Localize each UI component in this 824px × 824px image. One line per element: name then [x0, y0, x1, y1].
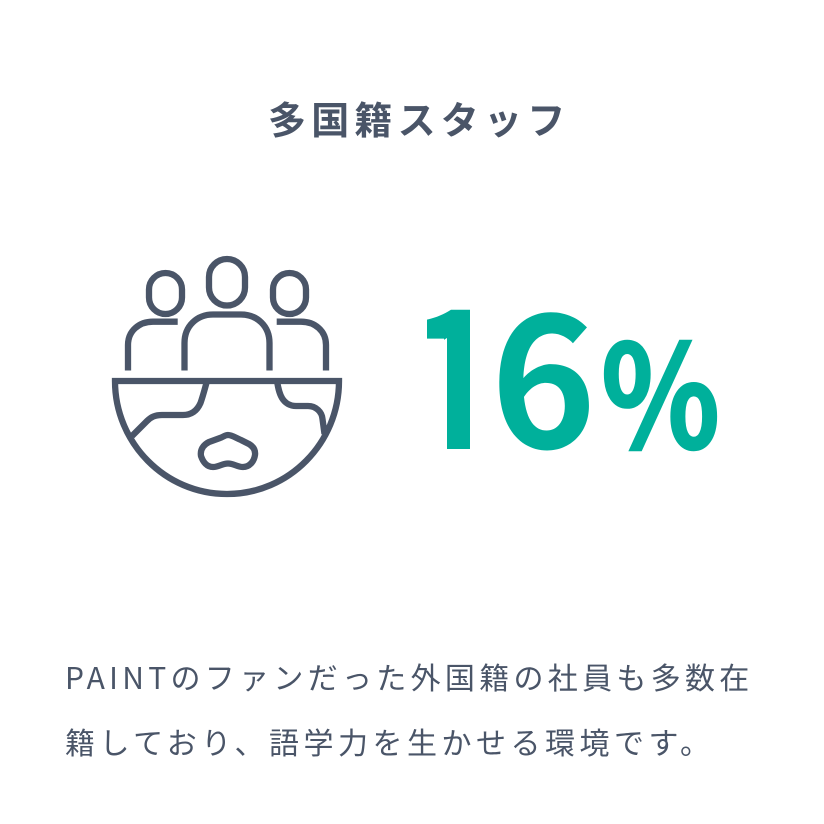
description text: PAINTのファンだった外国籍の社員も多数在: [65, 654, 754, 698]
statistic: 16%: 1: [398, 232, 509, 504]
statistic: 16%: 6: [490, 239, 597, 500]
statistic: 16%: [427, 310, 718, 452]
description text: [65, 654, 754, 763]
title: 多国籍スタッフ: [268, 90, 570, 145]
description text: 籍しており、語学力を生かせる環境です。: [65, 719, 714, 763]
statistic: 16%: %: [601, 283, 720, 489]
